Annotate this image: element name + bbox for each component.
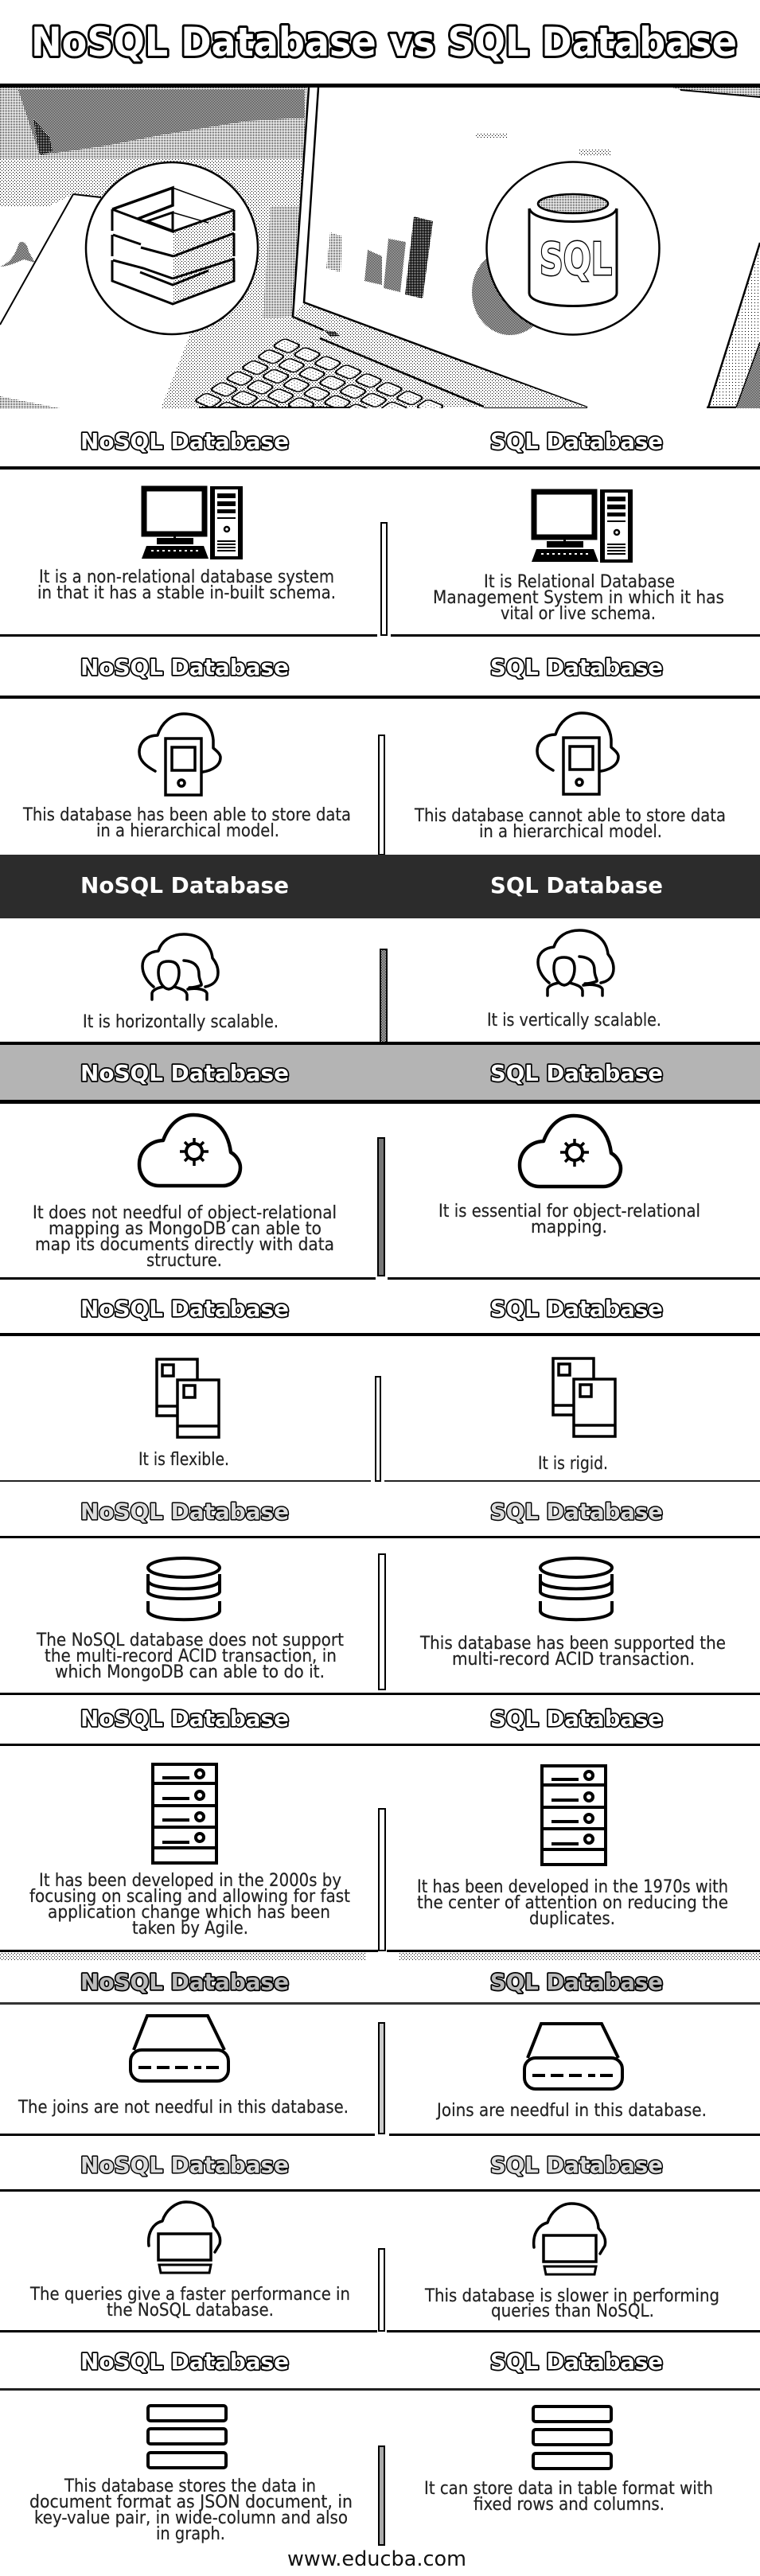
header: NoSQL Database: NoSQL Database xyxy=(80,2152,289,2178)
text: SQL history xyxy=(417,1877,728,1929)
icon: cloud people right xyxy=(538,930,614,996)
icon: cloud phone right xyxy=(537,713,618,794)
text: NoSQL system: It is a non-relational database system xyxy=(39,567,334,587)
panel: row 6 ACID transactions xyxy=(0,1498,760,1695)
text: NoSQL ACID: which MongoDB can able to do it. xyxy=(55,1662,325,1682)
icon: NoSQL stacked layers in circle xyxy=(86,162,258,334)
text: NoSQL queries xyxy=(29,2285,350,2321)
icon: storage drive right xyxy=(524,2024,622,2089)
text: SQL scale: It is vertically scalable. xyxy=(487,1011,661,1031)
text: SQL system: vital or live schema. xyxy=(501,604,656,624)
text: NoSQL history xyxy=(29,1871,350,1939)
text: NoSQL hierarchy xyxy=(22,805,351,841)
text: NoSQL system xyxy=(37,567,336,603)
text: NoSQL history: application change which has been xyxy=(48,1903,330,1923)
header: SQL Database: SQL Database xyxy=(490,654,663,680)
header: NoSQL Database: NoSQL Database xyxy=(80,654,289,680)
text: SQL history: It has been developed in the 1970s with xyxy=(417,1877,728,1897)
text: SQL queries xyxy=(424,2286,719,2321)
speckle strip under photo xyxy=(0,408,760,411)
text: SQL history: duplicates. xyxy=(529,1909,615,1929)
text: NoSQL hierarchy: in a hierarchical model. xyxy=(96,821,279,841)
text: SQL queries: queries than NoSQL. xyxy=(491,2301,654,2321)
text: SQL hierarchy: This database cannot able to store data xyxy=(414,806,726,826)
text: SQL ACID: multi-record ACID transaction. xyxy=(452,1650,695,1670)
icon: server rack right xyxy=(542,1766,606,1865)
header band: dark xyxy=(0,855,760,918)
icon: cloud people left xyxy=(142,934,218,1000)
icon: database left xyxy=(148,1558,220,1619)
text: SQL format: It can store data in table format with xyxy=(424,2479,713,2499)
text: NoSQL scale: It is horizontally scalable. xyxy=(83,1012,279,1032)
icon: desktop computer left xyxy=(142,486,243,559)
text: SQL queries: This database is slower in performing xyxy=(424,2286,719,2306)
panel: row 4 object-relational mapping xyxy=(0,1045,760,1280)
panel: row 5 flexibility xyxy=(0,1296,760,1482)
text: SQL mapping xyxy=(438,1202,700,1237)
icon: database right xyxy=(540,1558,612,1619)
header: SQL Database: SQL Database xyxy=(490,1060,663,1086)
title rule xyxy=(0,84,760,88)
icon: stacked rows left xyxy=(148,2406,226,2468)
icon: cloud phone left xyxy=(139,714,220,795)
text: NoSQL joins: The joins are not needful in this database. xyxy=(18,2098,349,2118)
text: SQL hierarchy xyxy=(414,806,726,842)
header: NoSQL Database: NoSQL Database xyxy=(80,1969,289,1995)
text: NoSQL system: in that it has a stable in-built schema. xyxy=(37,583,336,603)
icon: server rack left xyxy=(153,1764,216,1863)
text: SQL system xyxy=(433,572,724,624)
text: SQL joins: Joins are needful in this database. xyxy=(435,2101,707,2121)
panel: row 2 hierarchical model xyxy=(0,654,760,855)
text: SQL ACID xyxy=(419,1634,726,1670)
panel: row 8 joins xyxy=(0,1952,760,2136)
text: NoSQL format: document format as JSON document, in xyxy=(29,2492,353,2512)
header: SQL Database: SQL Database xyxy=(490,1296,663,1322)
header: SQL Database: SQL Database xyxy=(490,2348,663,2375)
header: SQL Database: SQL Database xyxy=(490,1969,663,1995)
text: NoSQL queries: the NoSQL database. xyxy=(107,2301,274,2321)
text: SQL format: fixed rows and columns. xyxy=(474,2495,665,2515)
text: NoSQL format: in graph. xyxy=(156,2524,225,2544)
header: NoSQL Database: NoSQL Database xyxy=(80,1705,289,1732)
text: NoSQL history: focusing on scaling and allowing for fast xyxy=(29,1887,350,1907)
icon: stacked rows right xyxy=(533,2406,611,2469)
icon: storage drive left xyxy=(131,2016,228,2081)
panel: row 7 history xyxy=(0,1705,760,1952)
text: SQL mapping: It is essential for object-relational xyxy=(438,1202,700,1222)
panel: row 9 query performance xyxy=(0,2152,760,2332)
text: NoSQL mapping: map its documents directly with data xyxy=(35,1235,334,1255)
text: SQL rigid: It is rigid. xyxy=(538,1454,608,1474)
text: NoSQL format: key-value pair, in wide-column and also xyxy=(34,2508,348,2528)
text: SQL system: It is Relational Database xyxy=(484,572,675,592)
text: NoSQL queries: The queries give a faster performance in xyxy=(29,2285,350,2305)
footer: website: www.educba.com xyxy=(287,2547,466,2571)
text: NoSQL ACID: the multi-record ACID transaction, in xyxy=(45,1647,337,1666)
text: NoSQL mapping: structure. xyxy=(146,1251,222,1271)
header: NoSQL Database: NoSQL Database xyxy=(80,872,289,898)
text: SQL hierarchy: in a hierarchical model. xyxy=(479,822,662,842)
header: NoSQL Database: NoSQL Database xyxy=(80,1498,289,1525)
text: NoSQL ACID xyxy=(36,1631,344,1682)
panel: row 1 system type xyxy=(0,428,760,637)
text: NoSQL mapping: mapping as MongoDB can able to xyxy=(49,1219,322,1239)
header: SQL Database: SQL Database xyxy=(490,428,663,454)
icon: cloud gear left xyxy=(139,1115,240,1186)
header: SQL Database: SQL Database xyxy=(490,1705,663,1732)
header: NoSQL Database: NoSQL Database xyxy=(80,428,289,454)
panel: row 10 data format xyxy=(0,2348,760,2545)
text: SQL history: the center of attention on reducing the xyxy=(417,1893,728,1913)
header: SQL Database: SQL Database xyxy=(490,2152,663,2178)
text: SQL ACID: This database has been supported the xyxy=(419,1634,726,1654)
header band: grey xyxy=(0,1045,760,1100)
text: NoSQL mapping: It does not needful of object-relational xyxy=(33,1203,337,1223)
icon: cloud gear right xyxy=(520,1116,621,1187)
text: NoSQL history: It has been developed in the 2000s by xyxy=(39,1871,341,1891)
header: NoSQL Database: NoSQL Database xyxy=(80,2348,289,2375)
icon: documents right xyxy=(553,1358,615,1436)
text: SQL format xyxy=(424,2479,713,2515)
icon: desktop computer right xyxy=(532,489,633,563)
text: NoSQL mapping xyxy=(33,1203,337,1271)
icon: SQL cylinder in circle: SQL xyxy=(540,234,612,286)
icon: documents left xyxy=(157,1359,219,1437)
text: NoSQL ACID: The NoSQL database does not support xyxy=(36,1631,344,1650)
header: NoSQL Database: NoSQL Database xyxy=(80,1060,289,1086)
text: NoSQL format: This database stores the data in xyxy=(64,2477,316,2496)
panel: row 3 scalability xyxy=(0,855,760,1045)
text: SQL mapping: mapping. xyxy=(531,1218,607,1237)
icon: SQL cylinder in circle xyxy=(487,162,659,334)
text: NoSQL history: taken by Agile. xyxy=(132,1919,248,1939)
text: NoSQL format xyxy=(29,2477,353,2544)
header: SQL Database: SQL Database xyxy=(490,872,663,898)
header: SQL Database: SQL Database xyxy=(490,1498,663,1525)
hero photo: laptop with database icons xyxy=(0,88,760,408)
header: NoSQL Database: NoSQL Database xyxy=(80,1296,289,1322)
text: SQL system: Management System in which it has xyxy=(433,588,724,608)
icon: cloud laptop right xyxy=(534,2204,606,2274)
icon: cloud laptop left xyxy=(149,2202,220,2273)
text: NoSQL flexible: It is flexible. xyxy=(138,1450,229,1470)
text: NoSQL hierarchy: This database has been able to store data xyxy=(22,805,351,825)
